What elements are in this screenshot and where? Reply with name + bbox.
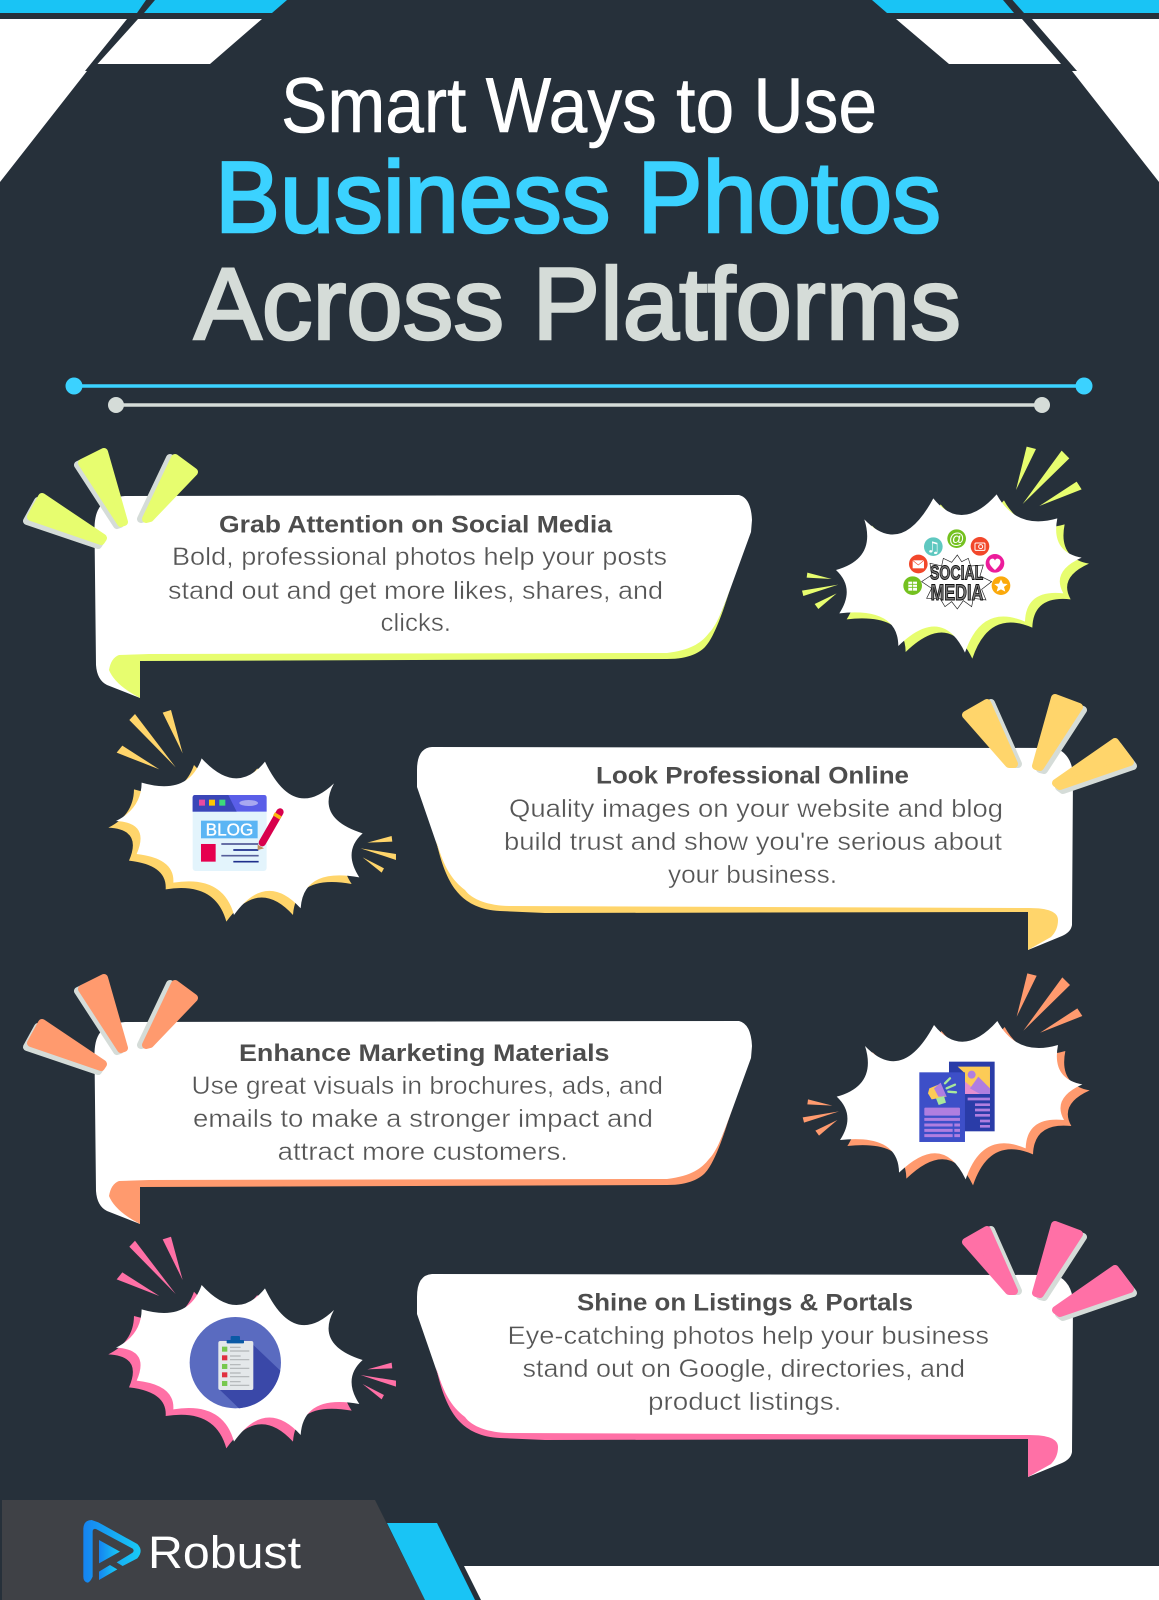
icon: social media: MEDIA [931, 580, 983, 605]
title: Business Photos [215, 142, 941, 254]
speech bubble [94, 495, 752, 698]
footer band [2, 1500, 1159, 1600]
heading and body text [168, 512, 667, 637]
heading and body text [192, 1040, 663, 1166]
speed lines [803, 973, 1082, 1136]
heading and body text: your business. [668, 861, 837, 889]
panel: look professional online [417, 698, 1133, 950]
speed lines [117, 710, 396, 873]
heading and body text: Look Professional Online [596, 762, 909, 790]
burst white [836, 494, 1082, 653]
heading and body text: Eye-catching photos help your business [508, 1322, 989, 1350]
burst: social media [802, 447, 1089, 659]
heading and body text [504, 762, 1003, 889]
heading and body text [508, 1290, 989, 1416]
burst: listings [108, 1237, 396, 1448]
burst white [116, 1285, 363, 1442]
title divider lines [66, 378, 1092, 413]
heading and body text: build trust and show you're serious about [504, 828, 1002, 856]
panel: grab attention on social media [27, 452, 752, 698]
heading and body text: Quality images on your website and blog [509, 795, 1003, 823]
heading and body text: Grab Attention on Social Media [219, 512, 612, 538]
burst shadow [844, 1027, 1090, 1185]
logo icon [83, 1520, 141, 1583]
icon: social media: ♫ [926, 538, 940, 556]
heading and body text: stand out and get more likes, shares, and [168, 577, 663, 605]
icon: blog page with pencil [193, 795, 281, 871]
title: Smart Ways to Use [281, 61, 877, 149]
heading and body text: clicks. [380, 609, 451, 637]
title: Across Platforms [194, 247, 961, 361]
burst white [116, 758, 363, 915]
panel: shine on listings and portals [417, 1225, 1133, 1477]
heading and body text: Enhance Marketing Materials [239, 1040, 610, 1067]
icon: social media: @ [949, 531, 964, 548]
attention rays [27, 978, 194, 1071]
attention rays [966, 1225, 1133, 1317]
heading and body text: attract more customers. [278, 1138, 568, 1166]
burst shadow [843, 500, 1089, 659]
logo wordmark: Robust [148, 1527, 302, 1578]
burst: blog [108, 710, 396, 922]
speech bubble [94, 1021, 752, 1224]
title [194, 61, 961, 361]
top left corner decoration [0, 0, 287, 182]
speed lines [802, 447, 1082, 609]
heading and body text: emails to make a stronger impact and [193, 1105, 653, 1133]
burst shadow [108, 1292, 355, 1448]
heading and body text: product listings. [648, 1388, 841, 1416]
heading and body text: Bold, professional photos help your posts [172, 543, 667, 571]
icon: social media [903, 529, 1010, 609]
icon: blog page with pencil: BLOG [206, 820, 253, 840]
burst: marketing brochure [803, 973, 1090, 1185]
icon: social media: SOCIAL [930, 561, 983, 584]
attention rays [27, 452, 194, 545]
heading and body text: Use great visuals in brochures, ads, and [192, 1072, 663, 1100]
logo: Robust [83, 1520, 302, 1583]
speed lines [117, 1237, 396, 1399]
speech bubble [417, 747, 1073, 950]
speech bubble [417, 1274, 1073, 1477]
heading and body text: Shine on Listings & Portals [577, 1290, 913, 1316]
attention rays [966, 698, 1133, 790]
panel: enhance marketing materials [27, 978, 752, 1224]
icon: brochure with megaphone [919, 1062, 995, 1142]
heading and body text: stand out on Google, directories, and [522, 1355, 965, 1383]
burst shadow [108, 765, 355, 922]
burst white [837, 1021, 1082, 1179]
top right corner decoration [872, 0, 1159, 182]
icon: clipboard checklist [190, 1317, 281, 1408]
